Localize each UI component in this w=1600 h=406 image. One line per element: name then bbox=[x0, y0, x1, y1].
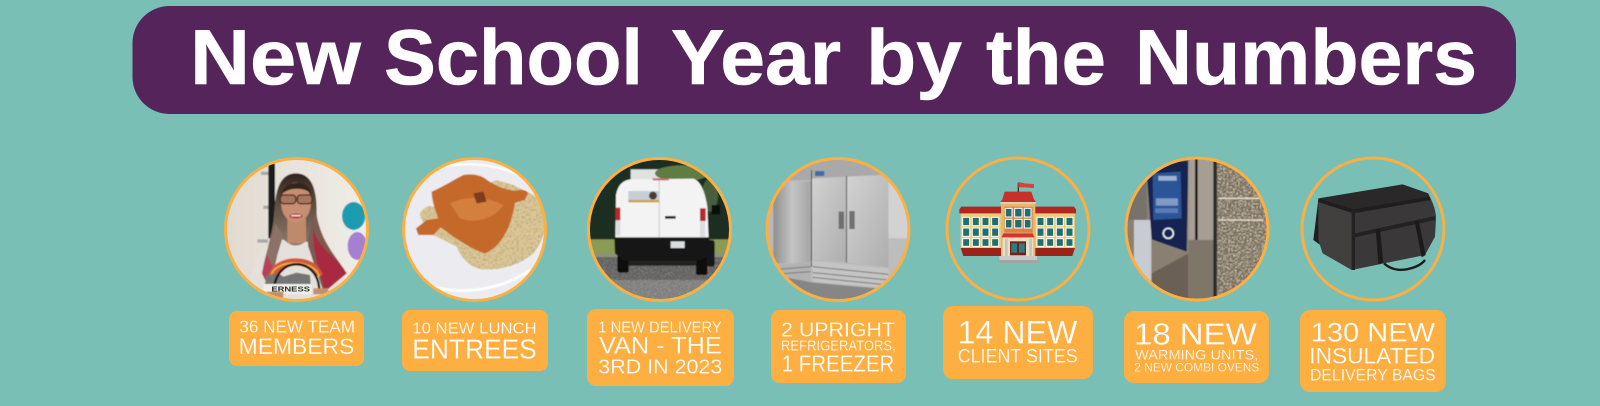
photo: combi oven bbox=[1128, 160, 1266, 298]
label box: REFRIGERATORS, bbox=[781, 339, 896, 355]
label box bbox=[402, 310, 548, 371]
icon: insulated delivery bag bbox=[1313, 184, 1436, 270]
label box: ENTREES bbox=[412, 333, 537, 364]
label box: 14 NEW bbox=[958, 314, 1078, 350]
label box: CLIENT SITES bbox=[958, 347, 1078, 368]
title text: Year bbox=[671, 13, 841, 101]
photo: team member bbox=[227, 160, 366, 299]
title text: Numbers bbox=[1135, 13, 1477, 101]
label box: 10 NEW LUNCH bbox=[412, 320, 537, 337]
label box: VAN - THE bbox=[599, 332, 722, 359]
title text: by bbox=[866, 13, 962, 101]
title text bbox=[190, 13, 1477, 101]
label box: 18 NEW bbox=[1134, 316, 1257, 351]
label box bbox=[771, 310, 906, 383]
panel: 1 new delivery van bbox=[587, 157, 734, 386]
icon: school building bbox=[959, 182, 1076, 263]
panel: 2 upright refrigerators, 1 freezer bbox=[765, 157, 912, 383]
photo: lunch entree bbox=[405, 160, 544, 299]
label box: 2 NEW COMBI OVENS bbox=[1134, 363, 1260, 375]
photo: delivery van bbox=[590, 160, 729, 299]
label box: DELIVERY BAGS bbox=[1310, 366, 1436, 385]
label box: 3RD IN 2023 bbox=[598, 357, 722, 379]
photo: team member: ERNESS bbox=[271, 285, 310, 294]
photo ring bbox=[947, 158, 1089, 300]
label box bbox=[587, 309, 734, 386]
photo: refrigerators bbox=[768, 160, 908, 299]
label box: WARMING UNITS, bbox=[1135, 346, 1258, 362]
title text: New bbox=[190, 13, 361, 101]
label box bbox=[229, 311, 364, 366]
photo ring bbox=[588, 158, 730, 300]
label box bbox=[1124, 311, 1269, 383]
title banner bbox=[132, 6, 1516, 114]
photo ring bbox=[1126, 158, 1268, 300]
photo ring bbox=[404, 158, 546, 300]
label box bbox=[943, 306, 1093, 379]
photo ring bbox=[1302, 158, 1444, 300]
photo ring bbox=[226, 158, 368, 300]
label box: MEMBERS bbox=[239, 334, 354, 359]
label box: 2 UPRIGHT bbox=[781, 319, 895, 342]
label box: 130 NEW bbox=[1311, 317, 1436, 347]
label box: 1 NEW DELIVERY bbox=[598, 319, 722, 336]
label box: INSULATED bbox=[1309, 343, 1435, 368]
label box: 36 NEW TEAM bbox=[239, 317, 355, 337]
title text: School bbox=[384, 13, 643, 101]
panel: 10 new lunch entrees bbox=[400, 157, 550, 371]
panel: 14 new client sites bbox=[943, 158, 1093, 379]
label box: 1 FREEZER bbox=[782, 351, 894, 377]
panel: 18 new warming units, 2 new combi ovens bbox=[1124, 157, 1272, 383]
photo ring bbox=[767, 158, 909, 300]
panel: 36 new team members bbox=[223, 157, 370, 366]
panel: 130 new insulated delivery bags bbox=[1300, 158, 1446, 392]
label box bbox=[1300, 310, 1446, 392]
title text: the bbox=[986, 13, 1106, 101]
